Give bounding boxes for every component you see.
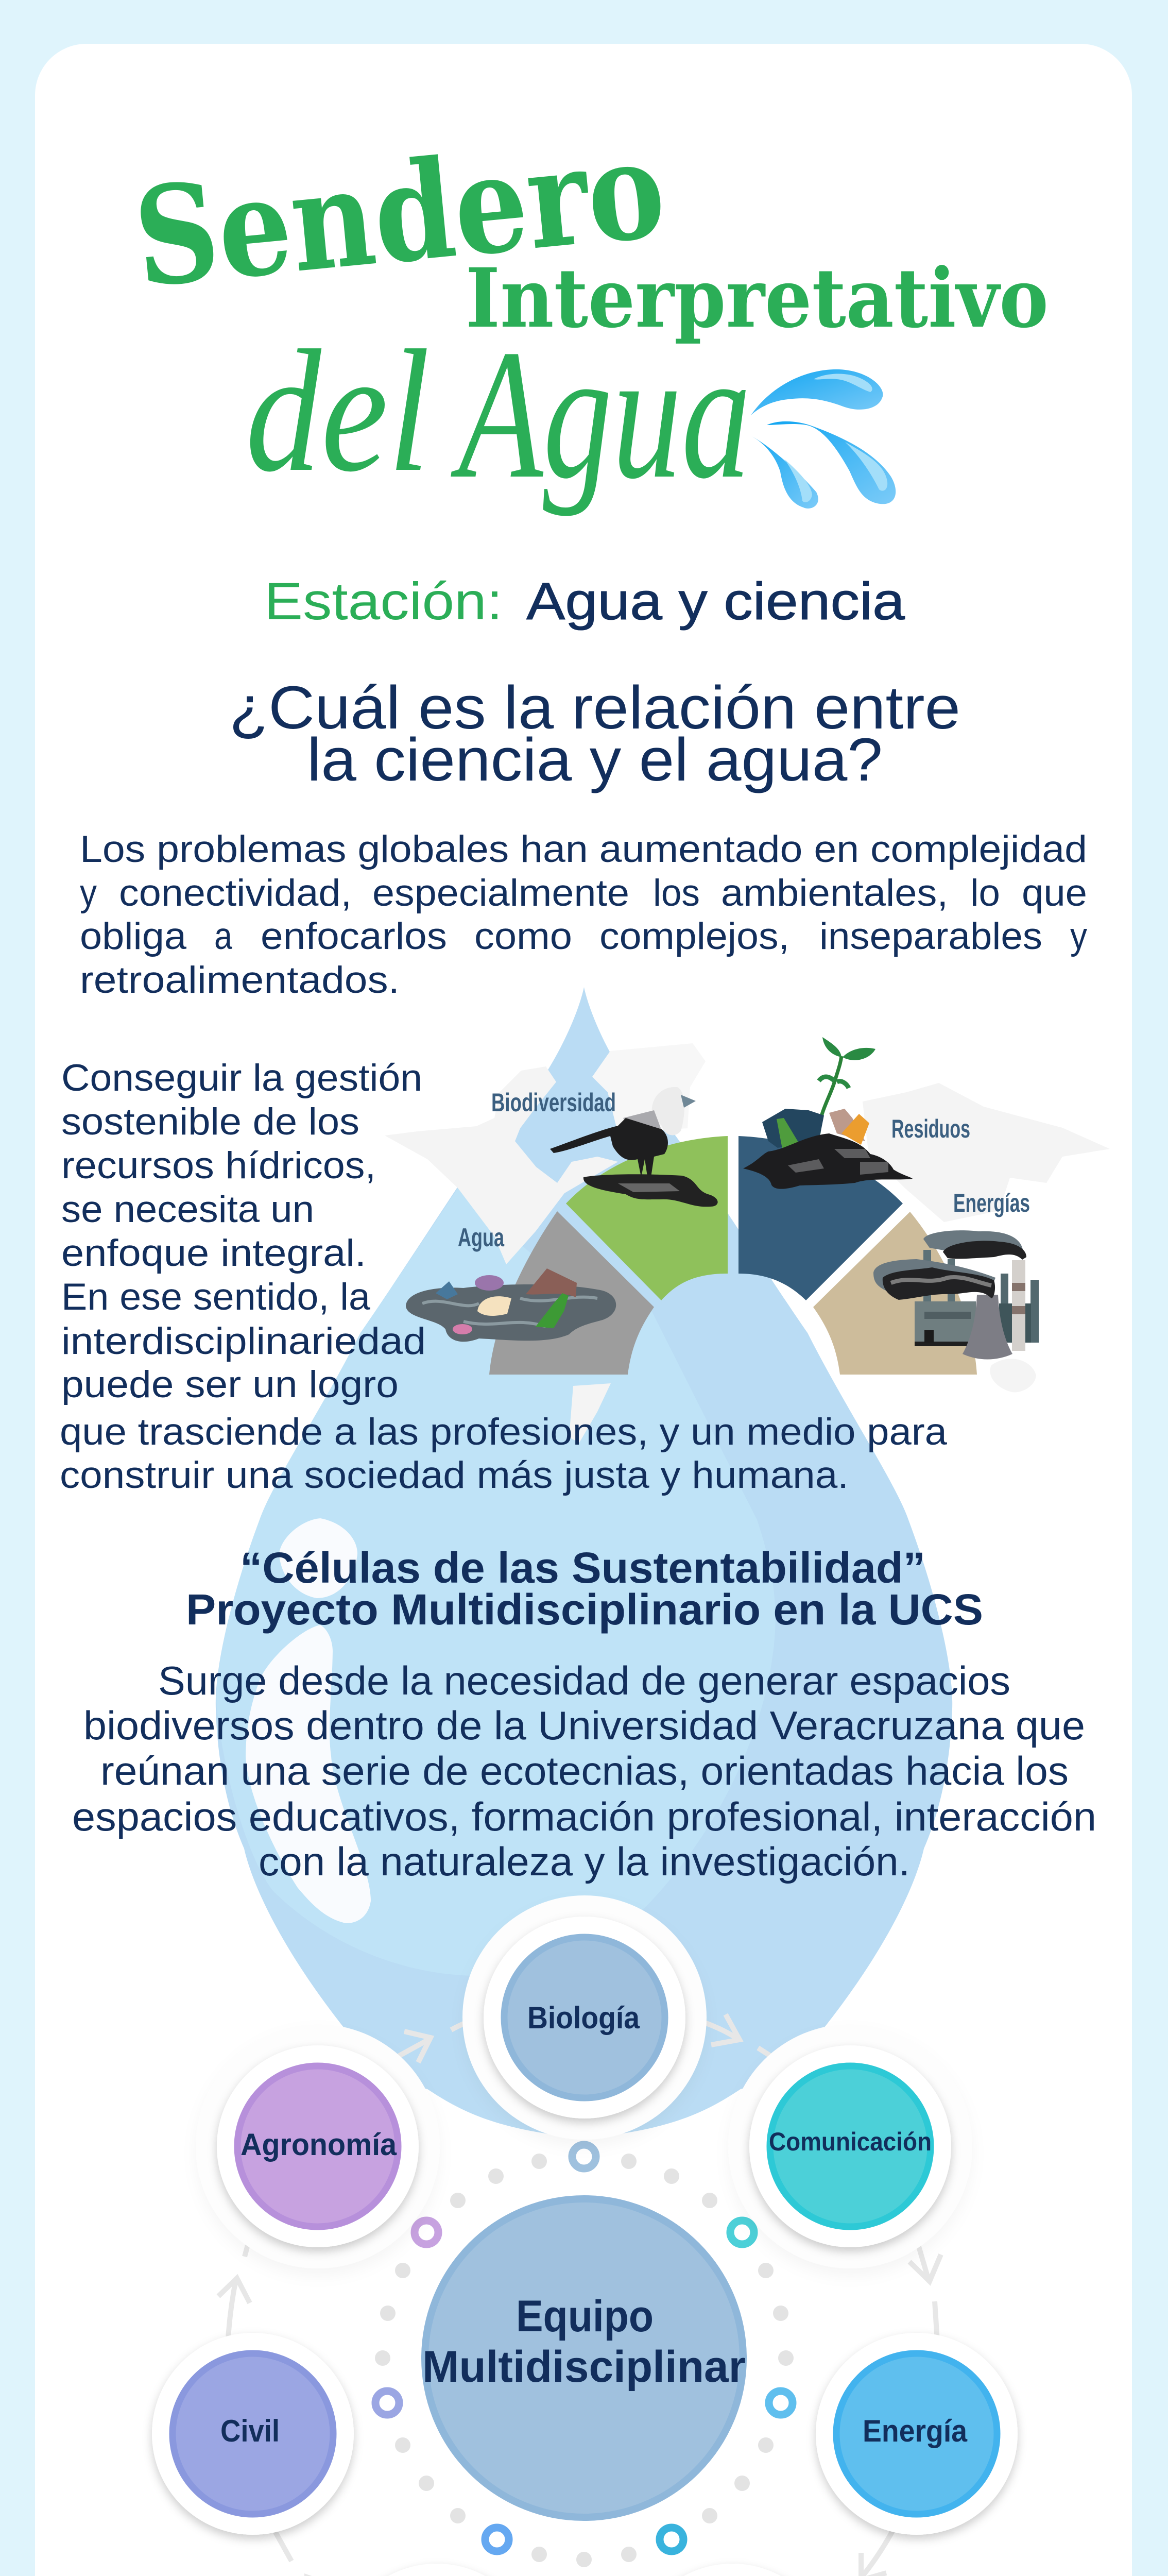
node: Energia: [816, 2333, 1018, 2535]
world map silhouette: [385, 1043, 1110, 1443]
text block: integral approach paragraph: se necesita un: [61, 1189, 314, 1230]
text block: intro paragraph: retroalimentados.: [80, 959, 400, 1001]
text block: integral approach paragraph: sostenible de los: [61, 1101, 359, 1143]
node: Equipo Multidisciplinar: Equipo: [516, 2292, 654, 2341]
node: Comunicacion: [728, 2024, 972, 2268]
text block: integral approach paragraph: construir una sociedad más justa y humana.: [60, 1454, 849, 1496]
sector: agua: [489, 1211, 654, 1375]
icon: polluted water: [406, 1268, 616, 1342]
icon: oiled bird: [550, 1087, 718, 1207]
text block: intro paragraph: ambientales,: [721, 872, 948, 914]
map labels: Residuos: [891, 1114, 970, 1143]
text block: intro paragraph: los: [653, 872, 700, 914]
title: del Agua: [246, 311, 751, 517]
text block: intro paragraph: obliga: [80, 916, 186, 957]
title: del Agua: del: [246, 314, 430, 508]
node: Ambiental: [336, 2564, 538, 2576]
text block: integral approach paragraph: enfoque integral.: [61, 1232, 366, 1274]
node: Pedagogia: [631, 2564, 833, 2576]
heading: question: [229, 674, 960, 794]
text block: project description: [72, 1658, 1096, 1884]
map labels: Agua: [458, 1223, 505, 1252]
node: Biologia: [462, 1895, 707, 2140]
text block: intro paragraph: inseparables: [819, 916, 1042, 957]
text block: intro paragraph: complejos,: [599, 916, 789, 957]
text block: integral approach paragraph: [60, 1057, 947, 1496]
icon: water splash: [751, 369, 896, 509]
map labels: Biodiversidad: [491, 1088, 616, 1117]
heading: question: ¿Cuál es la relación entre: [229, 674, 960, 742]
subtitle: Estacion: Agua y ciencia: [526, 572, 905, 631]
sector: residuos: [738, 1136, 903, 1300]
text block: integral approach paragraph: Conseguir la gestión: [61, 1057, 422, 1099]
subtitle: Estacion: Estación:: [264, 572, 503, 631]
node: Biologia: Biología: [527, 2001, 640, 2035]
heading: Celulas de las Sustentabilidad: [186, 1544, 983, 1634]
map labels: [458, 1088, 1030, 1252]
icon: waste pile with sprout: [743, 1037, 913, 1189]
title: Interpretativo: Interpretativo: [466, 251, 1049, 346]
text block: intro paragraph: que: [1022, 872, 1087, 914]
title: del Agua: Agua: [450, 311, 751, 517]
pie chart: four sectors: [489, 1136, 977, 1375]
text block: intro paragraph: Los problemas globales han aumentado en complejidad: [80, 828, 1087, 870]
text block: intro paragraph: como: [474, 916, 572, 957]
sector: biodiversidad: [566, 1136, 728, 1300]
cycle arrows: [218, 2013, 941, 2576]
text block: integral approach paragraph: recursos hídricos,: [61, 1145, 376, 1187]
text block: intro paragraph: conectividad,: [119, 872, 352, 914]
text block: integral approach paragraph: que trasciende a las profesiones, y un medio para: [60, 1411, 947, 1453]
node: Energia: Energía: [863, 2414, 968, 2448]
text block: project description: con la naturaleza y la investigación.: [259, 1839, 910, 1884]
text block: intro paragraph: y: [1070, 916, 1087, 957]
node: Comunicacion: Comunicación: [769, 2127, 932, 2156]
icon: factory: [873, 1230, 1039, 1359]
text block: integral approach paragraph: interdisciplinariedad: [61, 1320, 426, 1362]
text block: project description: Surge desde la necesidad de generar espacios: [158, 1658, 1010, 1703]
text block: project description: reúnan una serie de ecotecnias, orientadas hacia los: [100, 1748, 1069, 1793]
subtitle: Estacion: [264, 572, 905, 631]
text block: intro paragraph: lo: [970, 872, 1000, 914]
text block: integral approach paragraph: En ese sentido, la: [61, 1276, 370, 1318]
heading: Celulas de las Sustentabilidad: Proyecto Multidisciplinario en la UCS: [186, 1585, 983, 1634]
big water drop: [216, 987, 952, 2138]
node: Equipo Multidisciplinar: [422, 2199, 746, 2517]
text block: intro paragraph: y: [80, 872, 97, 914]
ring: grey and coloured dots: [375, 2145, 794, 2567]
text block: integral approach paragraph: puede ser un logro: [61, 1364, 399, 1405]
title: Sendero: Sendero: [128, 109, 671, 318]
drop lighter face: [216, 1188, 776, 1976]
map labels: Energías: [953, 1189, 1030, 1217]
text block: project description: espacios educativos, formación profesional, interacción: [72, 1794, 1096, 1839]
node: Civil: [152, 2333, 354, 2535]
drop highlight upper: [279, 1518, 357, 1598]
node: Agronomia: [196, 2024, 440, 2268]
sector: energias: [813, 1212, 977, 1375]
heading: question: la ciencia y el agua?: [307, 726, 883, 794]
text block: intro paragraph: [80, 828, 1087, 1001]
text block: intro paragraph: a: [214, 916, 232, 957]
text block: project description: biodiversos dentro de la Universidad Veracruzana que: [83, 1703, 1085, 1748]
heading: Celulas de las Sustentabilidad: “Células de las Sustentabilidad”: [240, 1544, 925, 1592]
node: Equipo Multidisciplinar: Multidisciplinar: [422, 2342, 746, 2392]
text block: intro paragraph: especialmente: [372, 872, 629, 914]
node: Agronomia: Agronomía: [241, 2127, 397, 2162]
drop highlight lower: [246, 1625, 371, 1923]
node: Civil: Civil: [220, 2414, 280, 2448]
text block: intro paragraph: enfocarlos: [261, 916, 447, 957]
